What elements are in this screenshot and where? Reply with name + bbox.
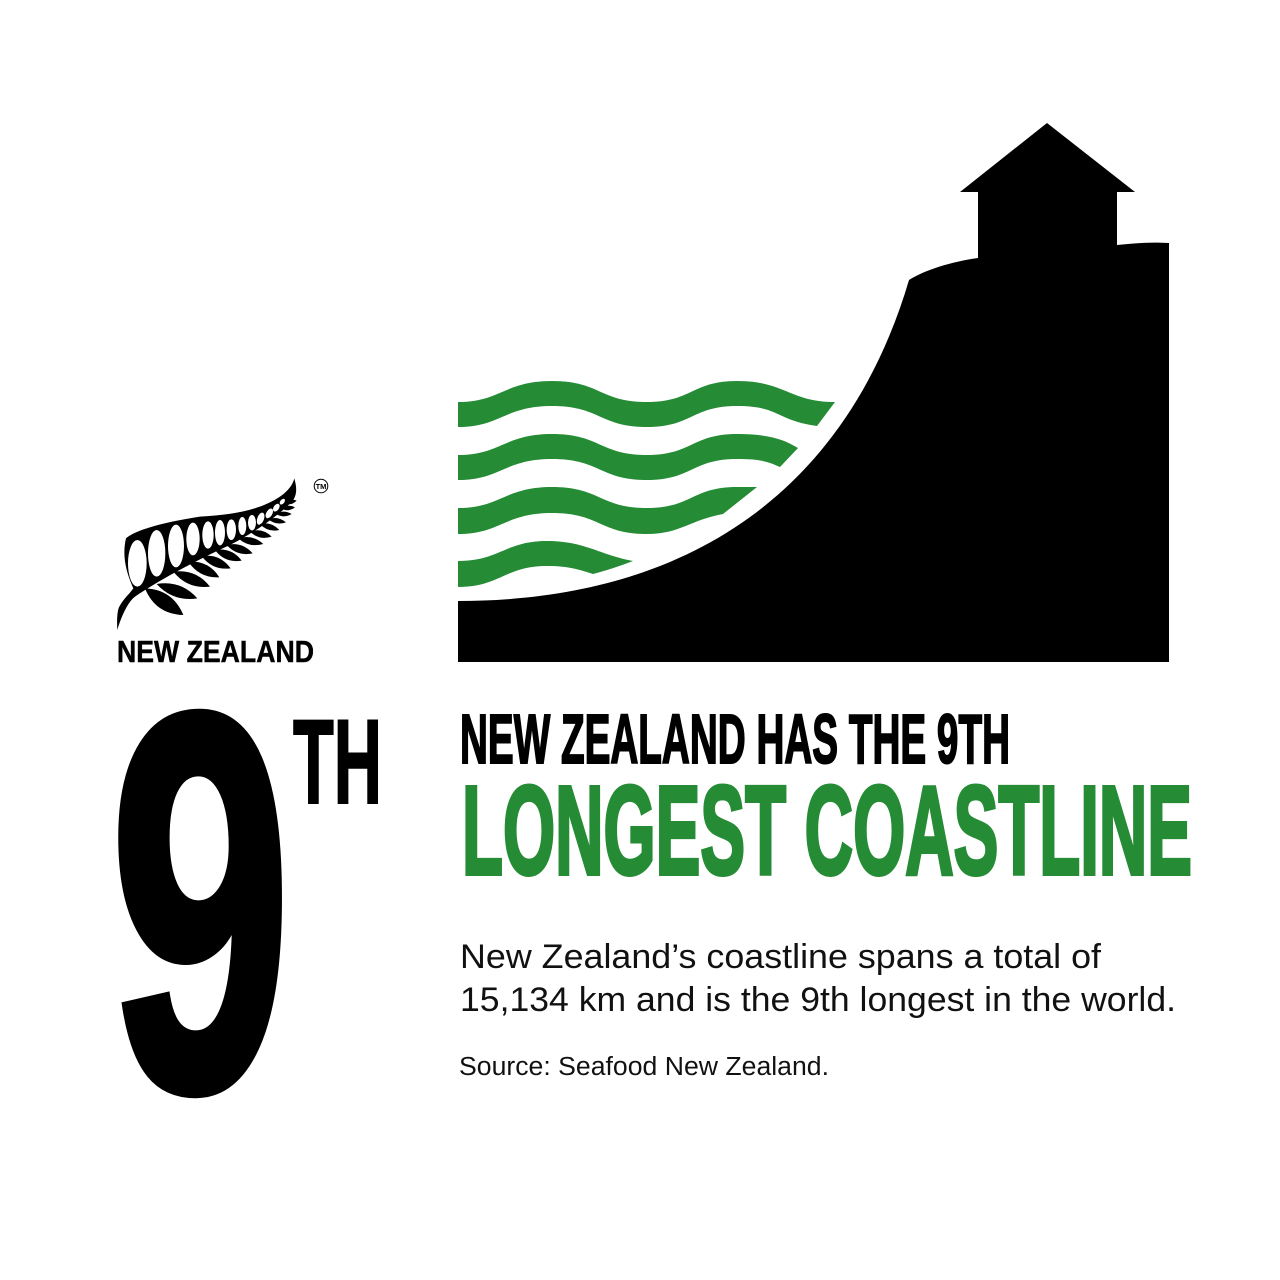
superscript TH: TH: [293, 695, 382, 829]
body text: New Zealand’s coastline spans a total of: [460, 938, 1102, 976]
heading: [460, 700, 1192, 901]
big numeral 9th: [110, 603, 382, 1202]
numeral 9: 9: [110, 603, 291, 1202]
logo wordmark: NEW ZEALAND: [117, 634, 314, 669]
body text: 15,134 km and is the 9th longest in the world.: [460, 981, 1176, 1019]
hill and house: [458, 123, 1169, 662]
icon: trademark: TM: [316, 482, 326, 491]
logo: New Zealand silver fern: [117, 478, 328, 669]
icon: fern: [117, 478, 297, 630]
body text: [460, 938, 1176, 1019]
waves: [458, 381, 835, 587]
icon: trademark: [314, 479, 328, 493]
illustration: coastline with waves and house: [458, 123, 1169, 662]
source: Source: Seafood New Zealand.: [459, 1053, 829, 1081]
leaves: [145, 500, 297, 615]
